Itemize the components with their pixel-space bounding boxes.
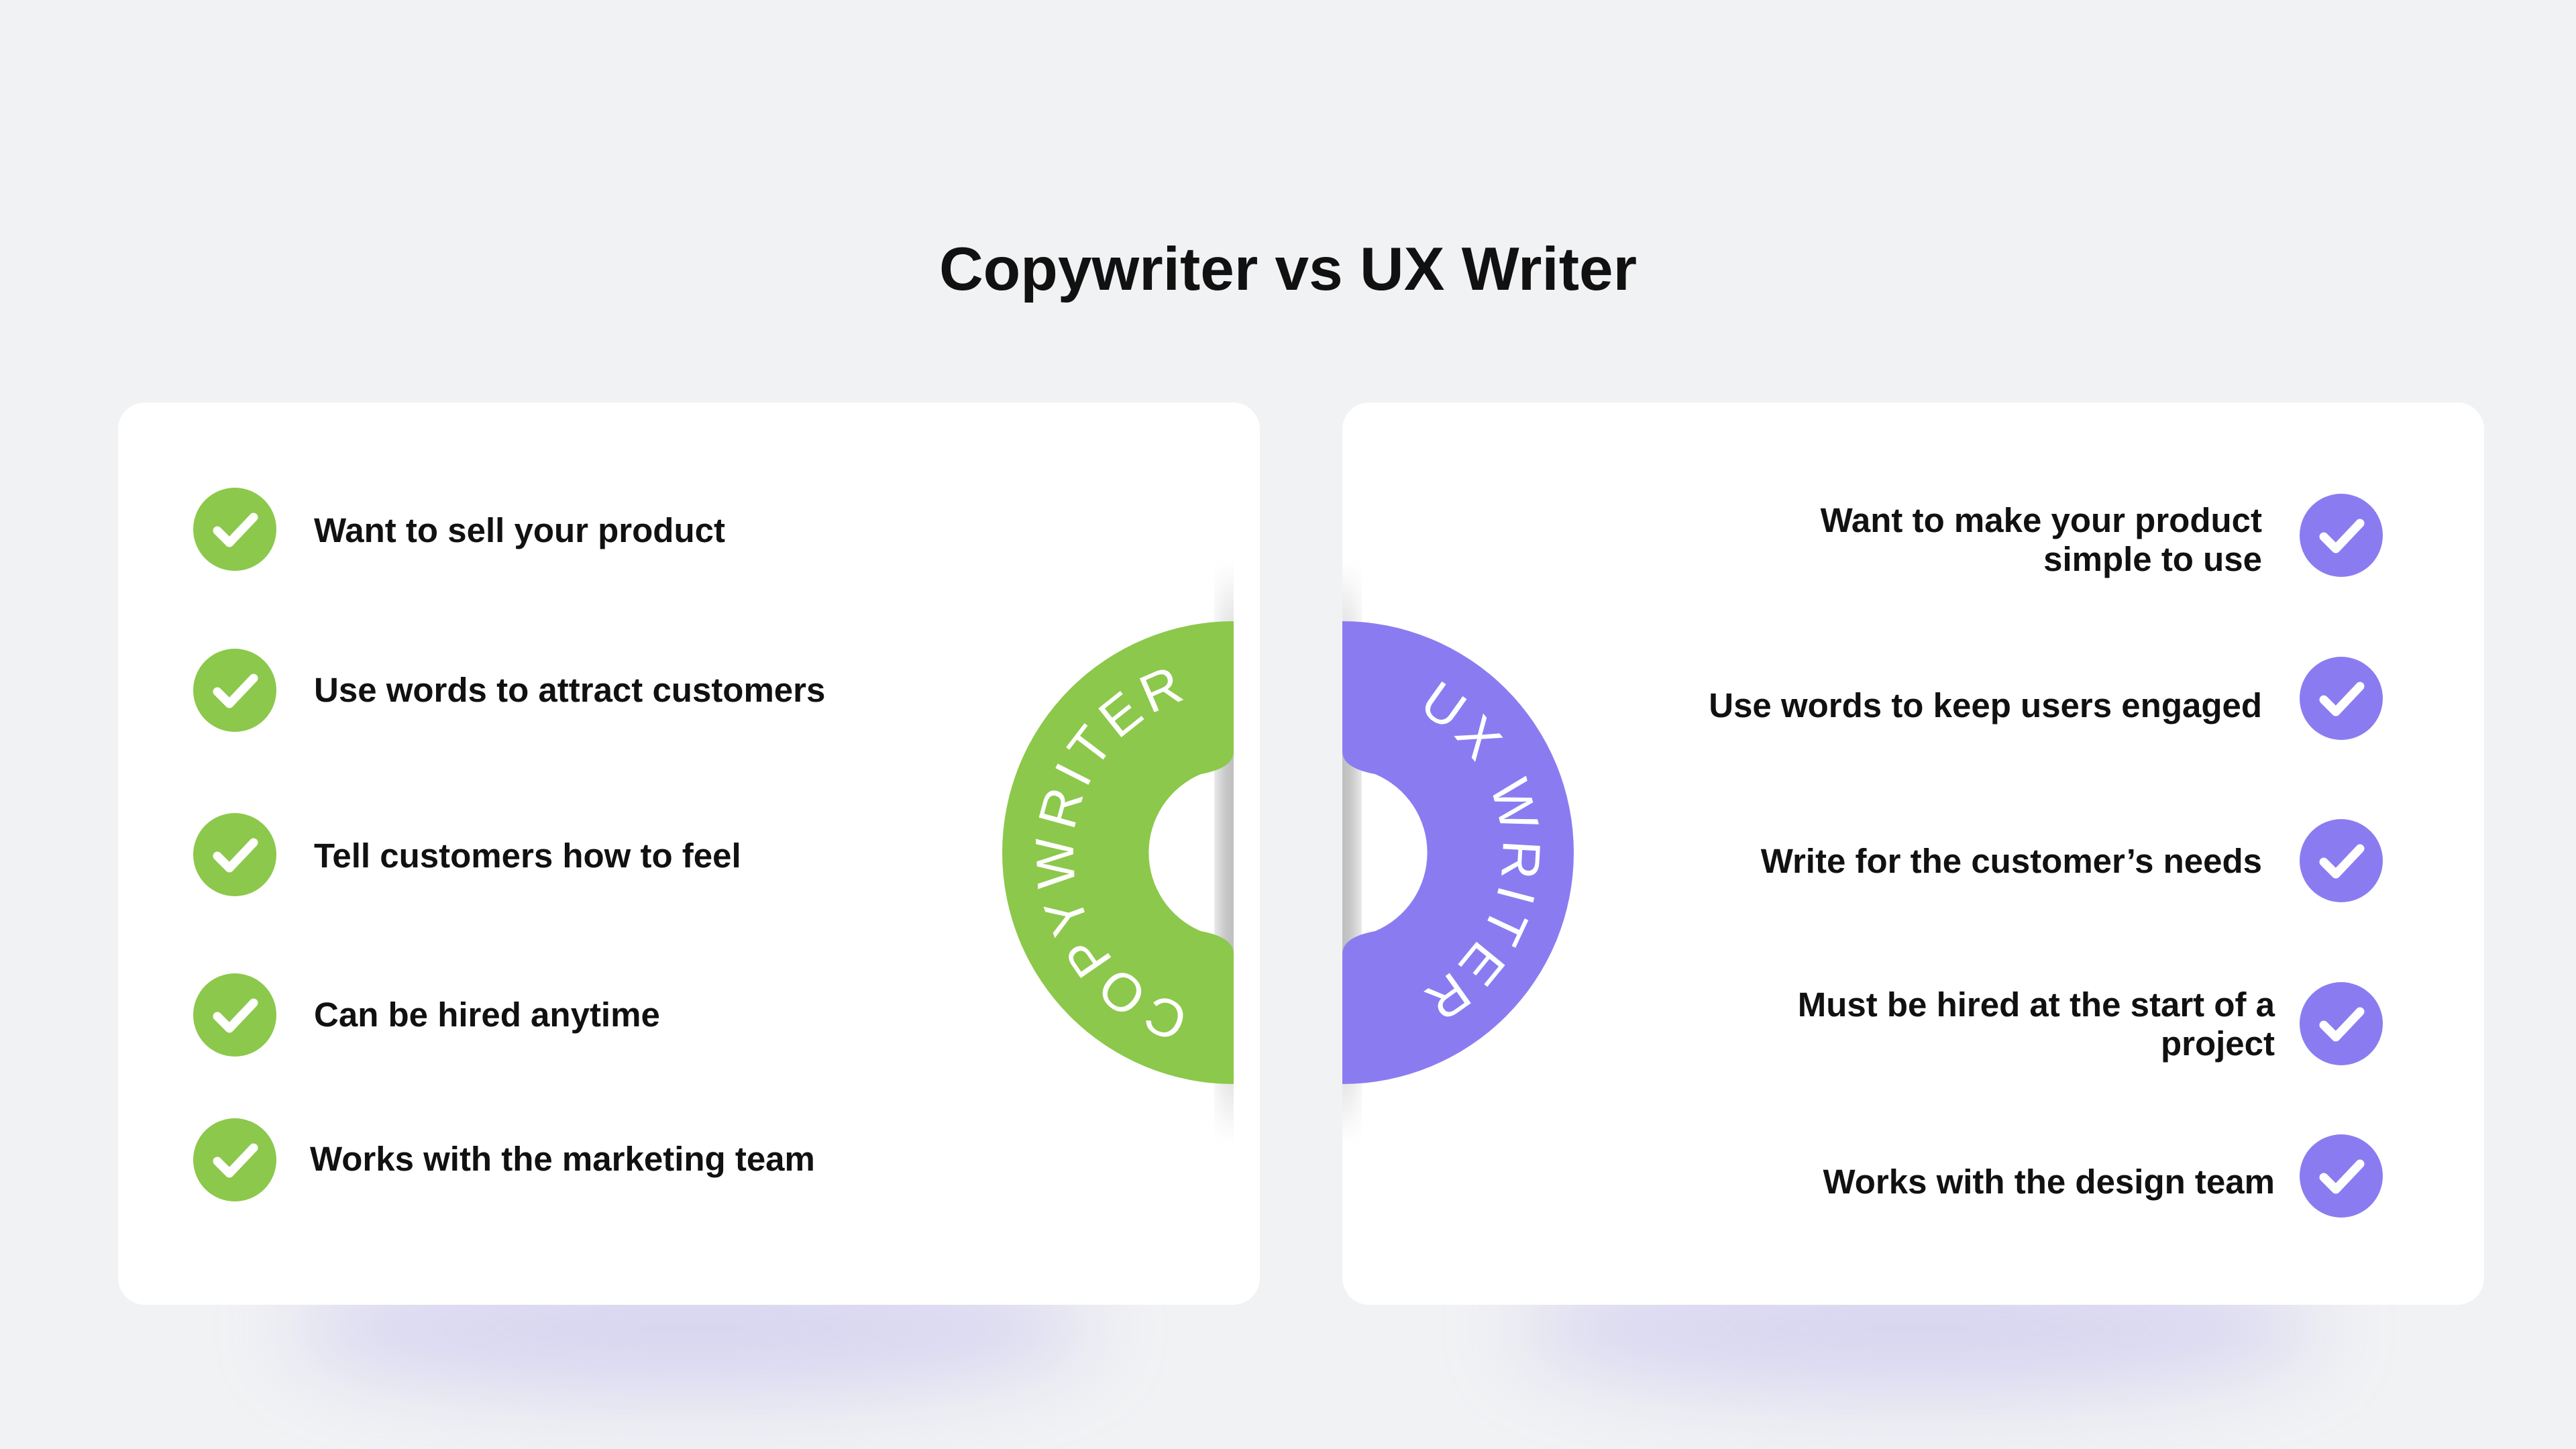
ring: ux writer: UX WRITER <box>1424 682 1540 1017</box>
list: ux writer traits: Works with the design team <box>1823 1163 2275 1201</box>
list: ux writer traits: Write for the customer’s needs <box>1761 842 2262 880</box>
panel: copywriter <box>118 402 1260 1305</box>
list: ux writer traits: simple to use <box>2043 540 2262 578</box>
list: copywriter traits: Works with the marketing team <box>310 1140 815 1178</box>
list: copywriter traits: Can be hired anytime <box>314 996 660 1034</box>
list: ux writer traits: Want to make your product <box>1821 501 2262 539</box>
ring: copywriter <box>1002 621 1234 1084</box>
list: ux writer traits: project <box>2161 1024 2275 1063</box>
list: copywriter traits: Use words to attract customers <box>314 671 825 709</box>
title: Copywriter vs UX Writer <box>939 235 1637 303</box>
list: ux writer traits: Must be hired at the start of a <box>1798 985 2275 1024</box>
center half rings <box>1002 582 1574 1122</box>
list: ux writer traits: Use words to keep users engaged <box>1709 686 2262 724</box>
panel: ux writer <box>1342 402 2484 1305</box>
list: copywriter traits: Tell customers how to feel <box>314 837 741 875</box>
list: ux writer traits <box>1709 494 2383 1218</box>
ring: ux writer <box>1342 621 1574 1084</box>
list: copywriter traits: Want to sell your product <box>314 511 725 549</box>
ring: copywriter: COPYWRITER <box>1036 669 1183 1037</box>
shadow strips <box>1218 564 1358 1140</box>
list: copywriter traits <box>193 488 825 1201</box>
